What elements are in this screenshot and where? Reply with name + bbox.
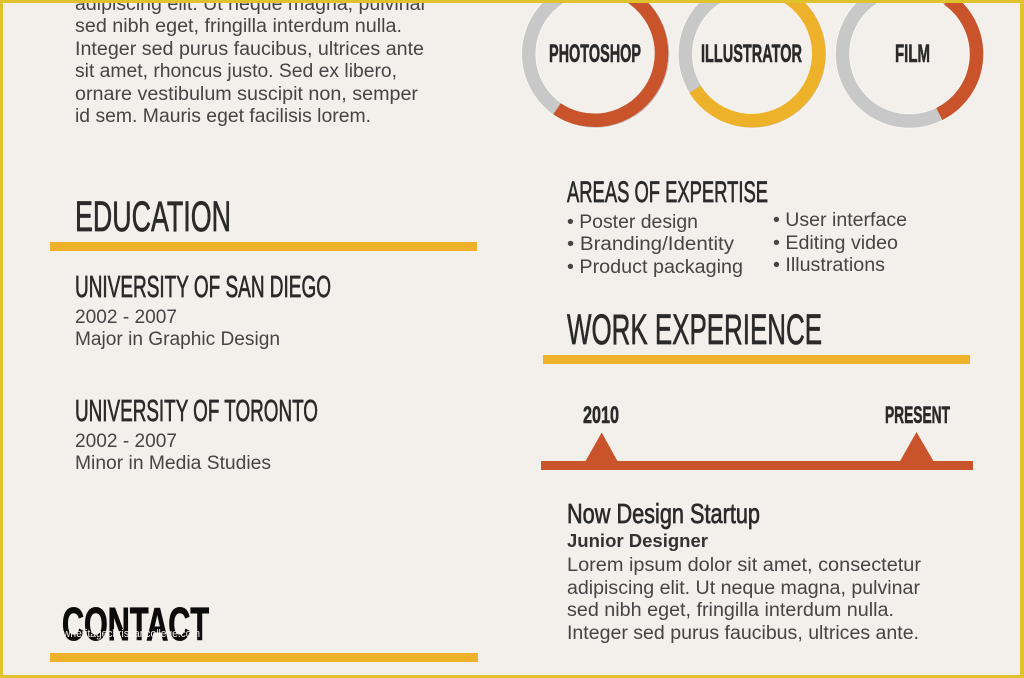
text block: university of san diego [75, 269, 331, 350]
panel: profile text: ornare vestibulum suscipit non, semper [75, 84, 419, 105]
list: expertise right column [773, 210, 907, 276]
text block: job entry: Now Design Startup [567, 498, 760, 529]
divider: work experience bar [543, 355, 970, 364]
panel: profile text: sed nibh eget, fringilla interdum nulla. [75, 16, 402, 37]
text block: job entry [567, 498, 922, 644]
list: expertise left column [567, 212, 743, 278]
heading: work experience: WORK EXPERIENCE [567, 306, 822, 354]
text block: job entry: sed nibh eget, fringilla interdum nulla. [567, 600, 894, 621]
panel: profile text [75, 0, 428, 127]
divider: education bar [50, 242, 477, 251]
list: expertise left column: • Poster design [567, 212, 698, 233]
chart: film skill ring: FILM [895, 40, 930, 68]
text block: university of san diego: UNIVERSITY OF SAN DIEGO [75, 269, 331, 304]
text: watermark url: wheritagechristiancollege.com [62, 628, 200, 640]
chart: photoshop skill ring: PHOTOSHOP [549, 40, 641, 68]
text block: university of toronto: UNIVERSITY OF TORONTO [75, 393, 318, 428]
list: expertise left column: • Branding/Identity [567, 234, 735, 255]
list: expertise right column: • Illustrations [773, 255, 885, 276]
heading: education: EDUCATION [75, 193, 231, 241]
panel: profile text: Integer sed purus faucibus, ultrices ante [75, 39, 424, 60]
panel: profile text: id sem. Mauris eget facilisis lorem. [75, 106, 371, 127]
heading: areas of expertise: AREAS OF EXPERTISE [567, 176, 768, 209]
text block: university of san diego: Major in Graphic Design [75, 329, 280, 350]
list: expertise right column: • Editing video [773, 233, 898, 254]
chart: film skill ring [842, 0, 977, 121]
text block: university of san diego: 2002 - 2007 [75, 307, 177, 328]
list: expertise left column: • Product packaging [567, 257, 743, 278]
text block: job entry: Lorem ipsum dolor sit amet, consectetur [567, 555, 922, 576]
chart: photoshop skill ring [529, 0, 663, 121]
text block: job entry: adipiscing elit. Ut neque magna, pulvinar [567, 578, 921, 599]
divider: contact bar [50, 653, 478, 662]
chart: career timeline: 2010 [583, 402, 619, 429]
panel: profile text: sit amet, rhoncus justo. Sed ex libero, [75, 61, 397, 82]
chart: illustrator skill ring: ILLUSTRATOR [701, 40, 802, 68]
text block: university of toronto: 2002 - 2007 [75, 431, 177, 452]
list: expertise right column: • User interface [773, 210, 907, 231]
heading: contact: CONTACT [62, 598, 209, 650]
text block: university of toronto [75, 393, 318, 474]
chart: career timeline: PRESENT [885, 402, 950, 429]
chart: illustrator skill ring [685, 0, 819, 121]
text block: job entry: Integer sed purus faucibus, ultrices ante. [567, 623, 919, 644]
text block: job entry: Junior Designer [567, 530, 708, 551]
text block: university of toronto: Minor in Media Studies [75, 453, 271, 474]
chart: career timeline [541, 402, 973, 470]
